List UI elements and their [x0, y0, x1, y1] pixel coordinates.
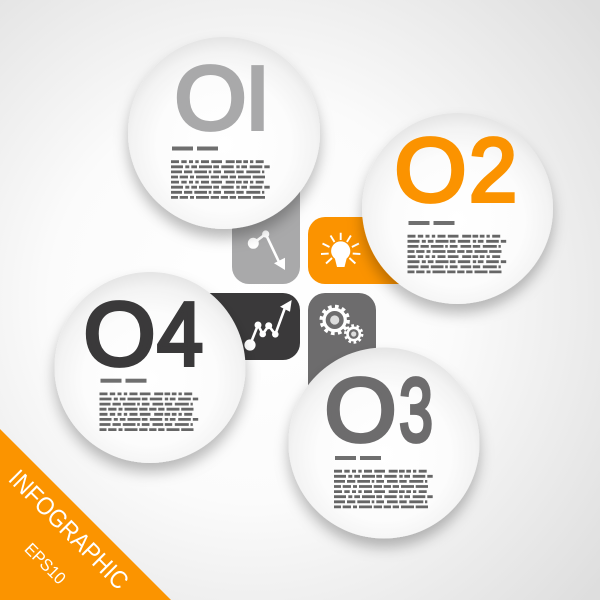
panel: step 02	[362, 113, 553, 304]
number 04: O	[84, 285, 156, 385]
number 04: 4	[157, 285, 203, 385]
text block 04	[100, 379, 198, 430]
icon: light bulb	[321, 233, 360, 267]
number 01: O	[174, 49, 247, 149]
number 02	[394, 121, 517, 221]
text block 03	[334, 456, 433, 507]
corner banner	[0, 429, 171, 600]
number 02: 2	[469, 121, 517, 221]
number 03: 3	[399, 361, 433, 461]
tile: dark with rising chart	[200, 293, 300, 360]
tile: orange with light bulb	[308, 217, 410, 284]
panel: step 03	[288, 348, 480, 538]
number 01: I	[245, 49, 270, 149]
text block 01	[171, 146, 270, 197]
panel: step 04	[54, 272, 246, 463]
tile: light gray with node arrow	[232, 185, 300, 284]
text block 02	[408, 221, 506, 272]
number 03	[324, 361, 433, 461]
icon: falling line arrow	[248, 230, 285, 270]
tile: mid gray with gears	[308, 293, 376, 400]
icon: rising chart arrow	[244, 300, 292, 351]
icon: gears	[322, 307, 362, 342]
number 03: O	[324, 361, 397, 461]
number 02: O	[394, 121, 467, 221]
banner subtitle: EPS10	[21, 539, 69, 588]
panel: step 01	[128, 37, 320, 229]
number 04	[84, 285, 203, 385]
